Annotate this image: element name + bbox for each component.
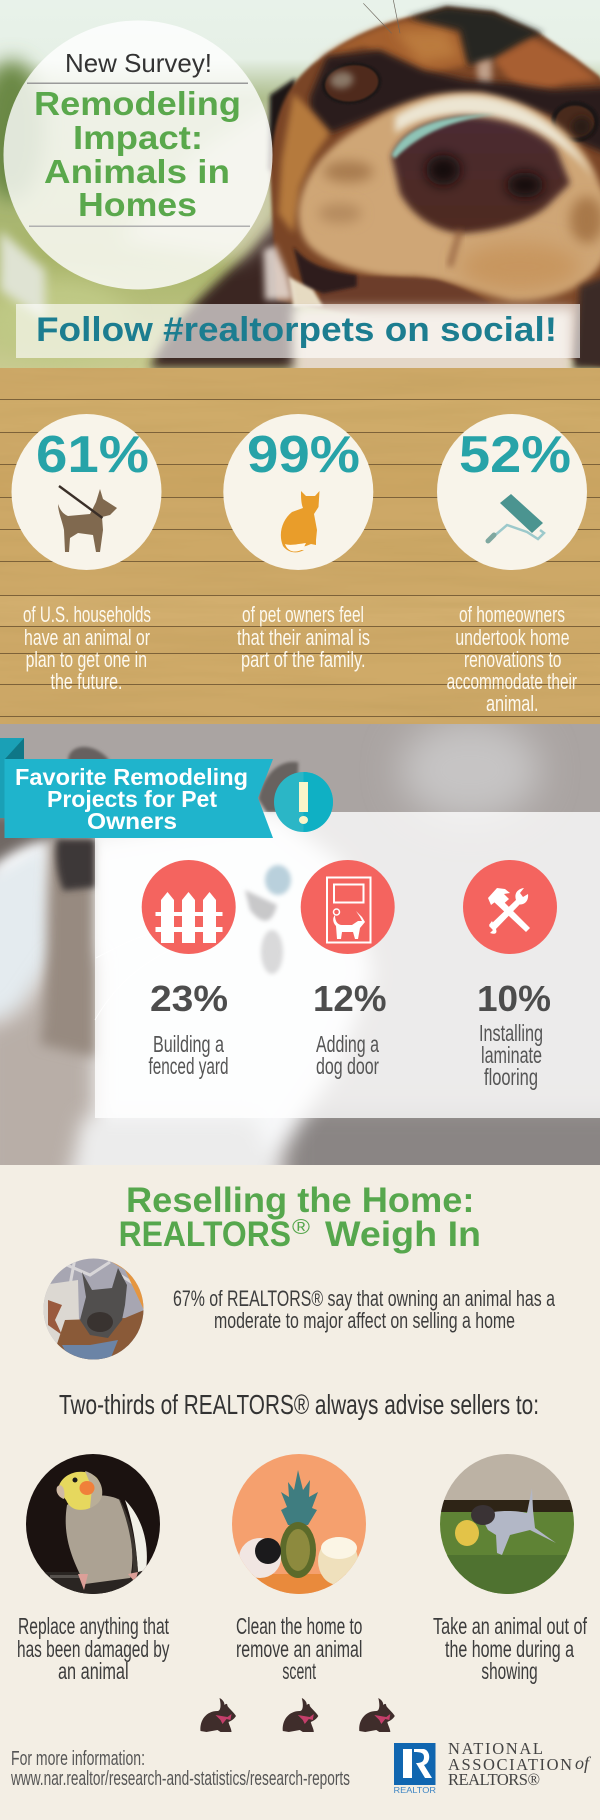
ribbon heading: Favorite Remodeling bbox=[15, 764, 248, 790]
project: dog door: dog door bbox=[316, 1053, 379, 1079]
project: fenced yard: 23% bbox=[150, 978, 228, 1019]
photo: guinea pigs and pineapple bbox=[232, 1454, 366, 1594]
project: fenced yard: fenced yard bbox=[148, 1053, 228, 1079]
stat: 52% of homeowners: animal. bbox=[486, 691, 538, 716]
project: fenced yard: Building a bbox=[153, 1031, 224, 1057]
title text bbox=[34, 85, 241, 223]
logo: National Association of Realtors: ASSOCIATION bbox=[448, 1755, 572, 1774]
white panel: favorite projects bbox=[95, 812, 600, 1118]
icon: rabbit 2 bbox=[283, 1698, 318, 1732]
stat: 99% of pet owners: part of the family. bbox=[241, 647, 366, 672]
footer: more information bbox=[10, 1748, 350, 1790]
heading: reselling the home: REALTORS bbox=[119, 1215, 291, 1254]
stat: 52% of homeowners bbox=[437, 414, 587, 716]
stat: 61% of households: 61% bbox=[36, 426, 149, 484]
panel: cat photo background bbox=[0, 720, 600, 1200]
project: dog door: 12% bbox=[313, 978, 386, 1019]
social banner bbox=[16, 304, 580, 358]
stat: 61% of households: of U.S. households bbox=[23, 602, 151, 627]
stat: 61% of households: plan to get one in bbox=[26, 647, 147, 672]
advice: clean the home: Clean the home to bbox=[236, 1613, 362, 1639]
advice: clean the home: remove an animal bbox=[236, 1636, 362, 1662]
icon: rabbit 3 bbox=[359, 1698, 395, 1732]
logo: National Association of Realtors: REALTOR bbox=[394, 1786, 436, 1795]
stat: 61% of households: the future. bbox=[50, 669, 122, 694]
text: 67% of realtors bbox=[173, 1286, 556, 1333]
logo: National Association of Realtors: REALTORS® bbox=[448, 1770, 540, 1789]
stat: 99% of pet owners: of pet owners feel bbox=[242, 602, 364, 627]
project: fenced yard bbox=[142, 860, 236, 1079]
hero photo: dog close-up bbox=[0, 0, 600, 383]
advice: take animal out: showing bbox=[481, 1658, 538, 1684]
panel: wood statistics bbox=[0, 368, 600, 724]
advice: take animal out bbox=[433, 1454, 587, 1684]
ribbon heading bbox=[0, 738, 273, 838]
advice: replace damaged items: Replace anything that bbox=[18, 1613, 169, 1639]
intro text: New Survey! bbox=[65, 48, 212, 78]
advice: replace damaged items bbox=[17, 1454, 170, 1684]
stat: 52% of homeowners: 52% bbox=[459, 426, 571, 484]
project: dog door: Adding a bbox=[316, 1031, 379, 1057]
icon: rabbit 1 bbox=[200, 1698, 236, 1732]
stat: 99% of pet owners bbox=[223, 414, 373, 672]
photo: french bulldog bbox=[43, 1258, 144, 1360]
heading: reselling the home: Reselling the Home: bbox=[126, 1181, 474, 1220]
title circle bbox=[4, 20, 272, 290]
ribbon heading: Owners bbox=[87, 808, 177, 834]
heading: reselling the home: ® bbox=[292, 1216, 311, 1239]
ribbon heading: Projects for Pet bbox=[47, 786, 217, 812]
footer: more information: For more information: bbox=[11, 1748, 145, 1770]
advice: replace damaged items: an animal bbox=[58, 1658, 129, 1684]
stat: 61% of households: have an animal or bbox=[24, 625, 150, 650]
title text: Remodeling bbox=[34, 85, 241, 122]
logo: National Association of Realtors: NATIONAL bbox=[448, 1739, 543, 1758]
project: laminate flooring: flooring bbox=[484, 1064, 538, 1090]
title text: Impact: bbox=[73, 119, 203, 156]
footer: more information: www.nar.realtor/research-and-statistics/research-reports bbox=[10, 1768, 350, 1790]
project: laminate flooring: 10% bbox=[477, 978, 551, 1019]
stat: 99% of pet owners: 99% bbox=[247, 426, 360, 484]
photo: dog with frisbee bbox=[440, 1454, 574, 1596]
heading: reselling the home: Weigh In bbox=[325, 1215, 481, 1254]
icon: exclamation circle bbox=[274, 772, 333, 832]
heading: reselling the home bbox=[119, 1181, 481, 1254]
logo: National Association of Realtors bbox=[394, 1739, 592, 1795]
stat: 99% of pet owners: that their animal is bbox=[237, 625, 370, 650]
advice: clean the home bbox=[232, 1454, 366, 1684]
icon: orange cat bbox=[281, 491, 320, 552]
title text: Animals in bbox=[44, 153, 230, 190]
panel: reselling the home background bbox=[0, 1165, 600, 1820]
photo: cockatiel bbox=[26, 1454, 160, 1594]
icon: hammer and wrench bbox=[488, 888, 530, 934]
project: laminate flooring: laminate bbox=[481, 1042, 542, 1068]
project: laminate flooring: Installing bbox=[479, 1020, 543, 1046]
logo: National Association of Realtors: of bbox=[575, 1753, 592, 1773]
stat: 61% of households bbox=[12, 414, 162, 694]
project: laminate flooring bbox=[463, 860, 557, 1090]
project: dog door bbox=[301, 860, 395, 1079]
social banner: Follow #realtorpets on social! bbox=[36, 311, 557, 349]
stat: 52% of homeowners: renovations to bbox=[464, 647, 561, 672]
icon: fence bbox=[156, 892, 222, 943]
icon: dog door bbox=[327, 878, 370, 942]
advice: clean the home: scent bbox=[282, 1658, 316, 1684]
icon: dog on leash bbox=[58, 486, 117, 552]
advice: replace damaged items: has been damaged by bbox=[17, 1636, 170, 1662]
icon: paint roller bbox=[488, 494, 544, 541]
title text: Homes bbox=[78, 186, 197, 223]
